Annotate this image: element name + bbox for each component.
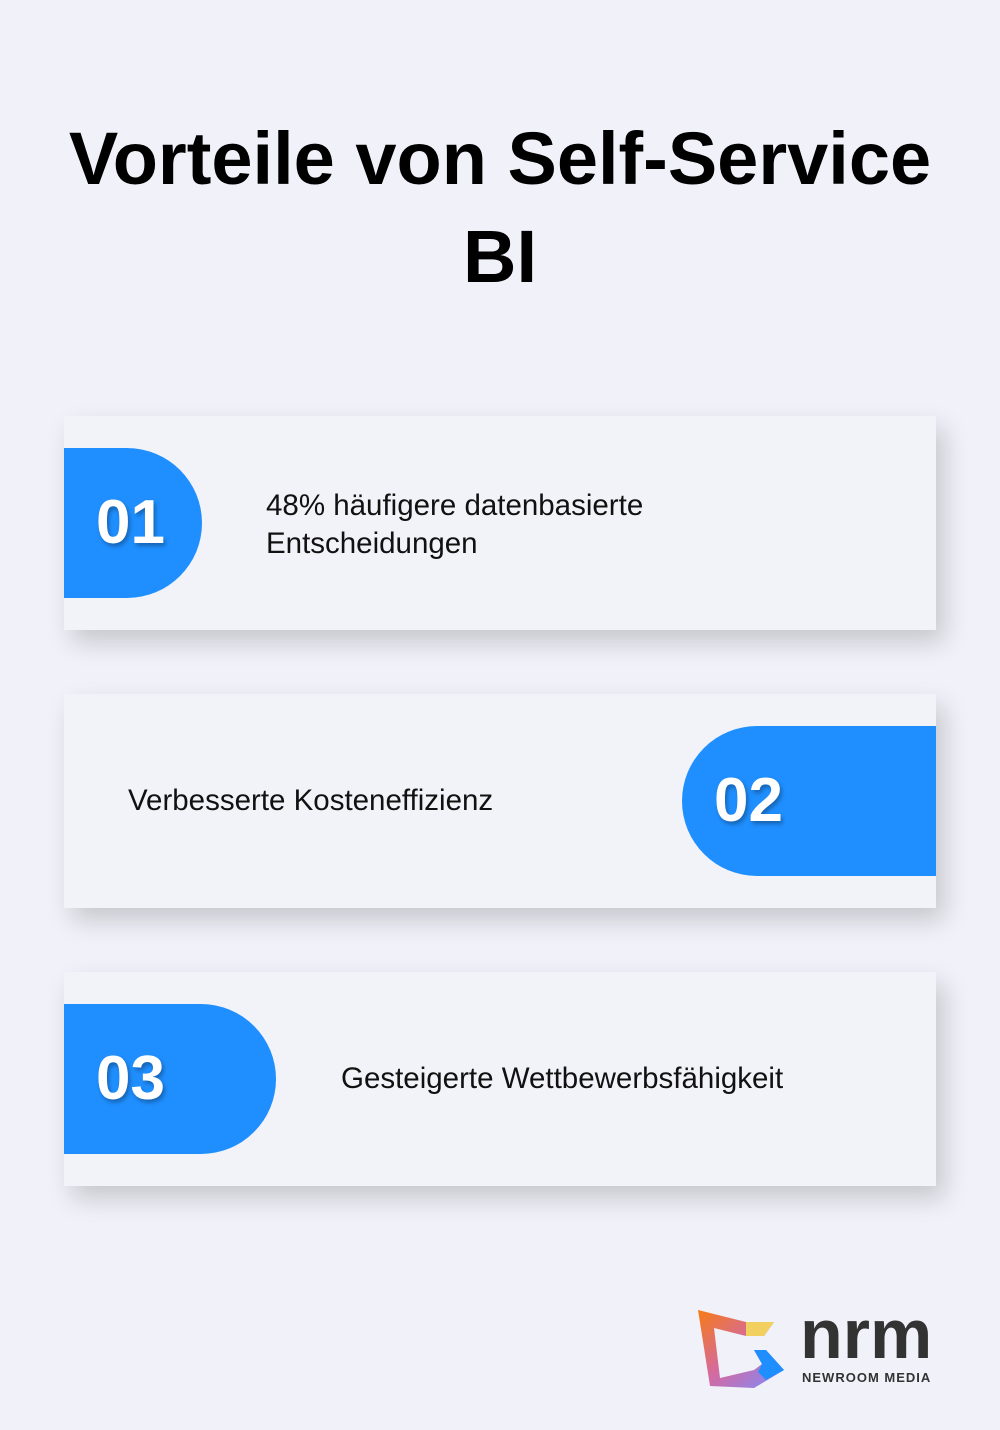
badge 02: 02: [714, 766, 783, 835]
title: BI: [463, 215, 537, 298]
badge 01: 01: [96, 488, 165, 557]
panel: benefit 3: [64, 972, 936, 1186]
title: Vorteile von Self-Service: [69, 117, 931, 200]
badge 02: [682, 726, 936, 876]
text 1: 48% häufigere datenbasierte: [266, 489, 643, 522]
logo text: nrm: [800, 1295, 932, 1373]
icon: logo mark: [698, 1310, 784, 1388]
logo: [698, 1295, 932, 1388]
text 3: Gesteigerte Wettbewerbsfähigkeit: [341, 1062, 783, 1095]
panel: benefit 2: [64, 694, 936, 908]
title: [69, 117, 931, 298]
text 1: Entscheidungen: [266, 527, 478, 560]
logo: NEWROOM MEDIA: [802, 1370, 931, 1385]
panel: benefit 1: [64, 416, 936, 630]
badge 01: [64, 448, 202, 598]
badge 03: [64, 1004, 276, 1154]
text 2: Verbesserte Kosteneffizienz: [128, 784, 493, 817]
text 1: [266, 489, 643, 560]
badge 03: 03: [96, 1044, 165, 1113]
